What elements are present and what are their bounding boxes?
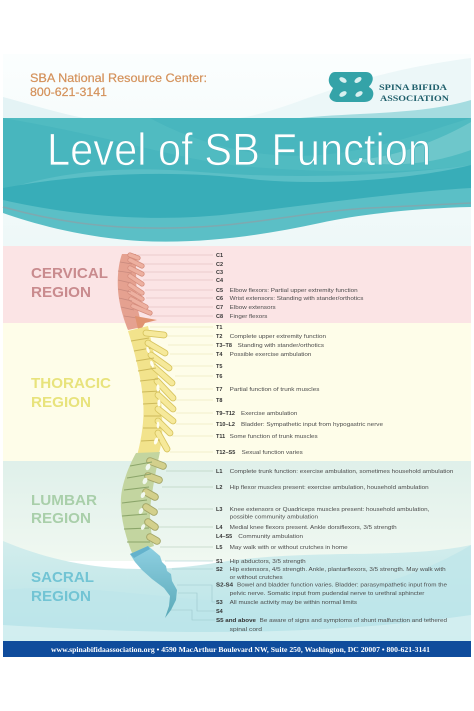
thoracic levels list: T6 (216, 374, 222, 380)
sacral levels list: S2 (216, 567, 223, 573)
thoracic levels list: T8 (216, 398, 222, 404)
sacral label (31, 569, 94, 605)
thoracic levels list: Sexual function varies (242, 450, 303, 456)
lumbar levels list: Knee extensors or Quadriceps muscles present: household ambulation, (230, 507, 430, 513)
cervical levels list: Finger flexors (230, 314, 268, 320)
cervical label: CERVICAL (31, 265, 108, 282)
thoracic levels list: T2 (216, 334, 222, 340)
lumbar levels list: L2 (216, 485, 222, 491)
sacral levels list: or without crutches (230, 575, 283, 581)
thoracic vertebrae (128, 326, 173, 456)
lumbar label: LUMBAR (31, 492, 97, 509)
thoracic levels list: Partial function of trunk muscles (230, 387, 320, 393)
logo: Spina Bifida Association: SPINA BIFIDA (379, 83, 447, 92)
thoracic levels list: Bladder: Sympathetic input from hypogastric nerve (241, 422, 383, 428)
cervical label (31, 265, 108, 301)
panel: cervical background (3, 246, 471, 323)
cervical levels list: C7 (216, 305, 223, 311)
sacral levels list: Hip abductors, 3/5 strength (230, 559, 306, 565)
cervical levels list: Wrist extensors: Standing with stander/orthotics (230, 296, 364, 302)
thoracic levels list: T11 (216, 434, 225, 440)
contact: national resource center: SBA National Resource Center: (30, 71, 207, 85)
cervical levels list: Elbow extensors (230, 305, 276, 311)
footer bar: www.spinabifidaassociation.org • 4590 MacArthur Boulevard NW, Suite 250, Washington, DC 20007 • 800-621-3141 (51, 646, 431, 654)
lumbar levels list: Medial knee flexors present. Ankle dorsiflexors, 3/5 strength (230, 525, 397, 531)
sacral label: REGION (31, 588, 91, 605)
thoracic levels list: T12–S5 (216, 450, 235, 456)
sacral levels list: Bowel and bladder function varies. Bladder: parasympathetic input from the (237, 582, 447, 588)
sacral levels list: Hip extensors, 4/5 strength. Ankle, plantarflexors, 3/5 strength. May walk with (230, 567, 446, 573)
title: Level of SB Function (47, 124, 431, 175)
thoracic label: THORACIC (31, 375, 111, 392)
spine illustration (118, 254, 177, 618)
lumbar levels list: Complete trunk function: exercise ambulation, sometimes household ambulation (230, 469, 453, 475)
lumbar levels list: L1 (216, 469, 222, 475)
cervical levels list: C2 (216, 262, 223, 268)
sacral levels list: S4 (216, 609, 224, 615)
panel: thoracic background (3, 323, 471, 461)
lumbar levels list: L4–S5 (216, 534, 232, 540)
thoracic levels list: Complete upper extremity function (230, 334, 326, 340)
sacral levels list: S5 and above (216, 618, 256, 624)
panel: sacral background (3, 541, 471, 641)
thoracic levels list (216, 325, 383, 456)
thoracic levels list: T9–T12 (216, 411, 235, 417)
cervical levels list: C5 (216, 288, 223, 294)
sacrum and coccyx (130, 546, 177, 618)
sacral label: SACRAL (31, 569, 94, 586)
cervical levels list: C1 (216, 253, 223, 259)
sacral levels list: pelvic nerve. Somatic input from pudendal nerve to urethral sphincter (230, 591, 425, 597)
thoracic label: REGION (31, 394, 91, 411)
sacral levels list: S2-S4 (216, 582, 234, 588)
region labels (31, 265, 111, 605)
thoracic levels list: Standing with stander/orthotics (238, 343, 324, 349)
cervical levels list: C6 (216, 296, 223, 302)
sacral levels list: All muscle activity may be within normal limits (230, 600, 357, 606)
cervical levels list: C3 (216, 270, 223, 276)
sacral levels list (216, 559, 447, 633)
thoracic levels list: T5 (216, 364, 222, 370)
lumbar vertebrae (121, 452, 163, 553)
thoracic levels list: Exercise ambulation (241, 411, 297, 417)
thoracic levels list: T1 (216, 325, 222, 331)
thoracic levels list: Some function of trunk muscles (230, 434, 318, 440)
cervical levels list (216, 253, 364, 320)
thoracic label (31, 375, 111, 411)
panel: lumbar background (3, 461, 471, 561)
thoracic levels list: Possible exercise ambulation (230, 352, 311, 358)
thoracic levels list: T3–T8 (216, 343, 232, 349)
lumbar levels list (216, 469, 453, 551)
lumbar levels list: Community ambulation (238, 534, 303, 540)
teal wave band (3, 118, 471, 242)
cervical levels list: C8 (216, 314, 223, 320)
cervical vertebrae (118, 254, 157, 330)
footer bar (3, 641, 471, 657)
sacral levels list: S3 (216, 600, 223, 606)
cervical levels list: Elbow flexors: Partial upper extremity function (230, 288, 358, 294)
lumbar label (31, 492, 97, 527)
thoracic levels list: T7 (216, 387, 222, 393)
sacral levels list: S1 (216, 559, 223, 565)
leader lines (135, 255, 215, 620)
lumbar levels list: L3 (216, 507, 222, 513)
lumbar label: REGION (31, 510, 91, 527)
contact: national resource center (30, 71, 207, 99)
panel: header banner (3, 54, 471, 246)
logo: Spina Bifida Association: ASSOCIATION (380, 94, 449, 103)
lumbar levels list: L5 (216, 545, 222, 551)
lumbar levels list: May walk with or without crutches in home (230, 545, 348, 551)
thoracic levels list: T10–L2 (216, 422, 235, 428)
thoracic levels list: T4 (216, 352, 223, 358)
sacral levels list: spinal cord (230, 627, 262, 633)
lumbar levels list: L4 (216, 525, 223, 531)
logo: Spina Bifida Association (329, 72, 449, 103)
lumbar levels list: possible community ambulation (230, 514, 318, 520)
contact: national resource center: 800-621-3141 (30, 85, 107, 99)
sacral levels list: Be aware of signs and symptoms of shunt malfunction and tethered (260, 618, 447, 624)
lumbar levels list: Hip flexor muscles present: exercise ambulation, household ambulation (230, 485, 429, 491)
cervical levels list: C4 (216, 278, 224, 284)
cervical label: REGION (31, 284, 91, 301)
